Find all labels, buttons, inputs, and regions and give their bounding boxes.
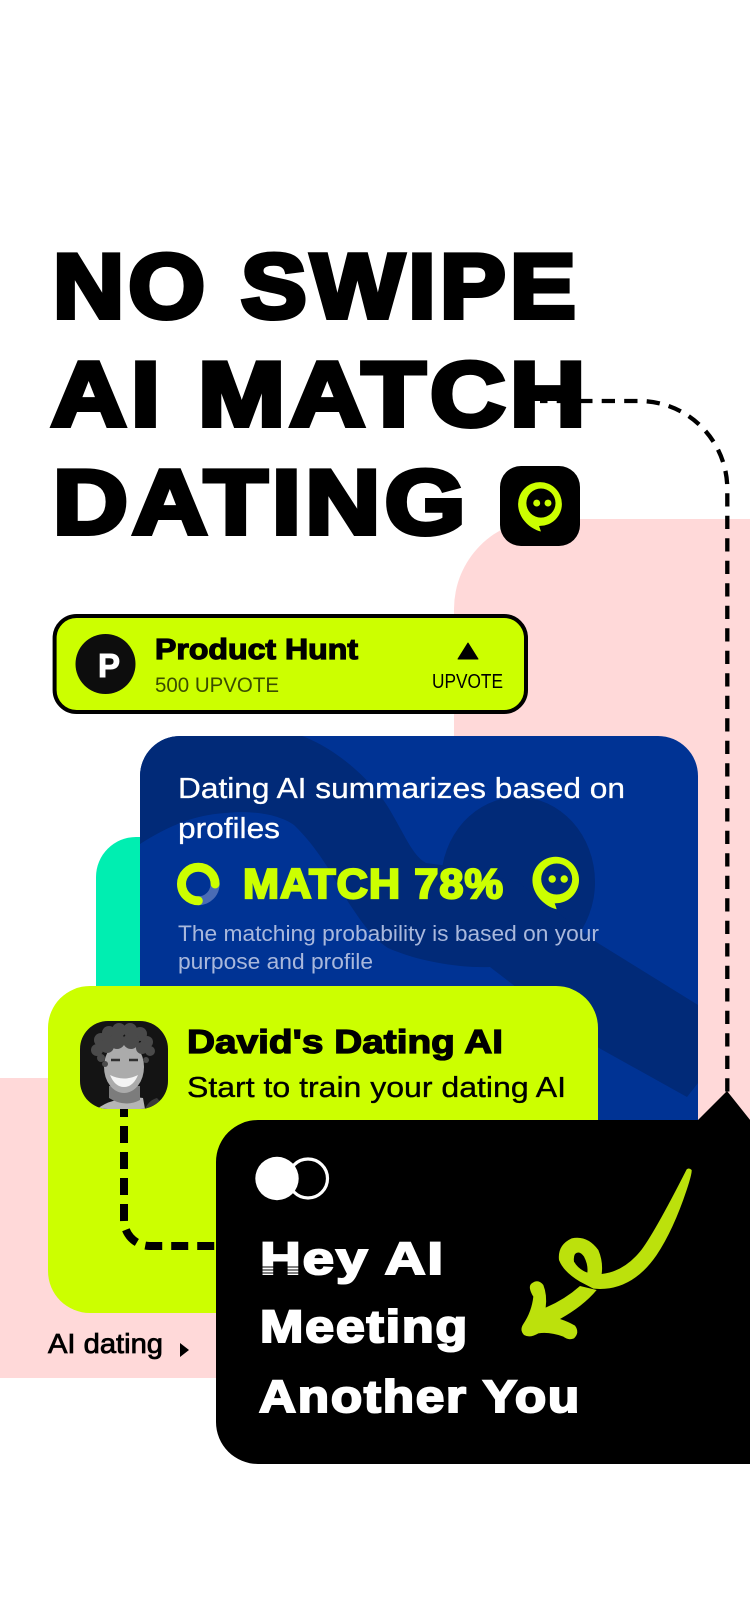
match description: purpose and profile <box>178 949 373 974</box>
match description: The matching probability is based on your <box>178 921 599 946</box>
panel: lime David card <box>48 986 598 1313</box>
match description <box>178 921 599 974</box>
quote text: Another You <box>259 1371 581 1422</box>
icon: Product Hunt circle <box>76 634 136 694</box>
dashed connector from avatar <box>124 1109 218 1246</box>
quote text: Meeting <box>260 1301 469 1352</box>
quote text <box>259 1233 581 1422</box>
title: AI MATCH <box>51 344 590 446</box>
icon: two circles <box>255 1157 328 1200</box>
card text: Dating AI summarizes based on <box>178 773 625 805</box>
title: NO SWIPE <box>53 236 580 338</box>
decorative dark speech-bubble shape <box>140 736 698 1097</box>
AI dating label: AI dating <box>48 1328 163 1359</box>
card heading: David's Dating AI <box>187 1024 503 1061</box>
panel: blue match card: profiles <box>178 813 280 845</box>
upvote label: UPVOTE <box>432 671 503 693</box>
icon: smile bubble <box>532 857 579 909</box>
icon: app logo <box>500 466 580 546</box>
panel: pink background left <box>0 1078 260 1378</box>
arrow: hand-drawn green <box>521 1168 692 1339</box>
panel: pink background right <box>454 519 750 1130</box>
icon: upvote triangle <box>458 643 478 659</box>
panel: blue match card <box>140 736 698 1125</box>
match percentage: MATCH 78% <box>243 860 504 907</box>
icon: Product Hunt circle: P <box>98 647 120 684</box>
avatar <box>80 1021 168 1109</box>
card subheading: Start to train your dating AI <box>187 1072 566 1104</box>
panel: black quote card <box>216 1091 750 1464</box>
upvote count: 500 UPVOTE <box>155 674 279 697</box>
title <box>51 236 590 554</box>
badge name: Product Hunt <box>155 634 359 666</box>
title: DATING <box>53 452 470 554</box>
panel: mint back card <box>96 837 160 1000</box>
icon: match ring <box>182 867 215 901</box>
quote text: Hey AI <box>260 1233 445 1284</box>
panel: Product Hunt badge <box>55 616 526 712</box>
dashed connector from title <box>540 401 727 1092</box>
